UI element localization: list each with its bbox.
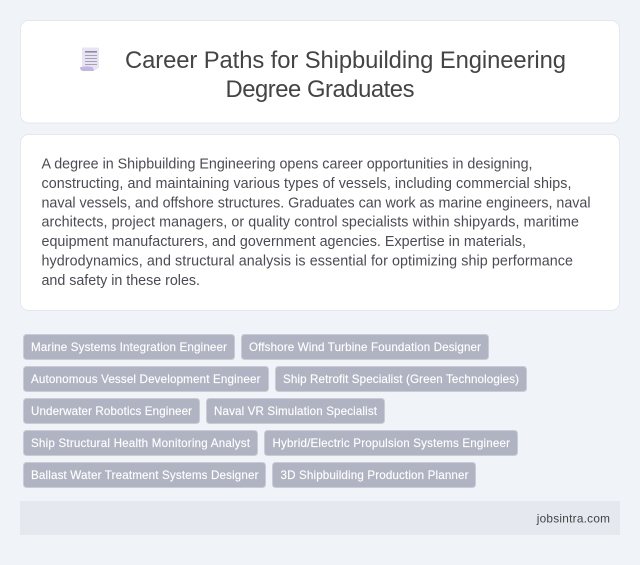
tag: Ship Retrofit Specialist (Green Technologies) [283,373,519,386]
tag: Marine Systems Integration Engineer [31,341,227,354]
title: Career Paths for Shipbuilding Engineering [125,47,566,74]
title [125,47,566,103]
tag [264,430,518,456]
description text: A degree in Shipbuilding Engineering opens career opportunities in designing, [42,156,532,172]
tag: Hybrid/Electric Propulsion Systems Engineer [272,437,510,450]
title: Degree Graduates [226,76,415,103]
panel: description [20,134,620,310]
tags: career paths [24,334,526,488]
tag: Ballast Water Treatment Systems Designer [31,469,259,482]
description text: naval vessels, and offshore structures. Graduates can work as marine engineers, naval [42,195,590,211]
description text: architects, project managers, or quality control specialists within shipyards, maritime [42,215,579,231]
description text: and safety in these roles. [42,273,200,289]
footer: jobsintra.com [536,511,610,525]
tag [276,366,526,392]
tag: Naval VR Simulation Specialist [214,405,378,418]
tag: Ship Structural Health Monitoring Analyst [31,437,251,450]
description text: equipment manufacturers, and government agencies. Expertise in materials, [42,234,526,250]
description text: constructing, and maintaining various types of vessels, including commercial ships, [42,176,572,192]
tag: Autonomous Vessel Development Engineer [31,373,261,386]
description text [42,156,590,289]
tag: Offshore Wind Turbine Foundation Designer [249,341,481,354]
tag [24,366,268,392]
tag: 3D Shipbuilding Production Planner [280,469,469,482]
panel: header [20,20,620,123]
tag [24,462,266,488]
description text: hydrodynamics, and structural analysis is essential for optimizing ship performance [42,254,573,270]
tag [206,398,384,424]
icon: document [80,48,99,71]
tag [24,334,234,360]
tag: Underwater Robotics Engineer [31,405,192,418]
tag [24,398,200,424]
tag [272,462,476,488]
tag [242,334,488,360]
footer [20,501,620,535]
tag [24,430,258,456]
